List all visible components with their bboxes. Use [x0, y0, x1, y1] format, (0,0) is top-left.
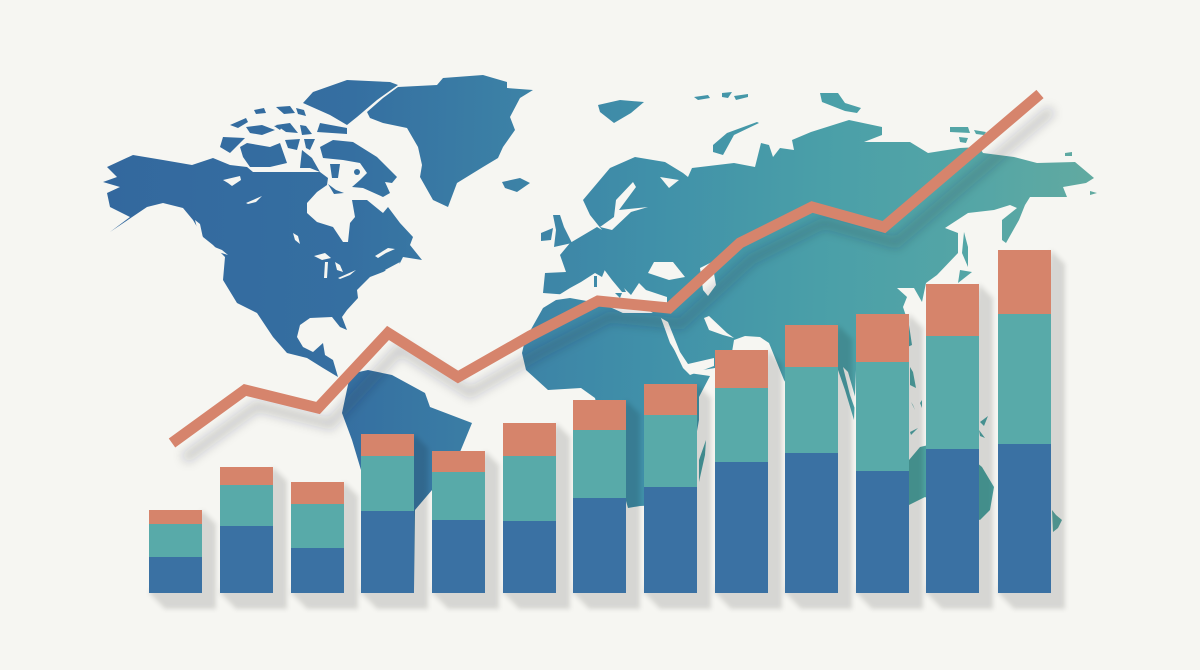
bar 10 — [785, 325, 838, 593]
lakes and inlets of North America — [195, 176, 400, 337]
Italy and Mediterranean islands — [594, 262, 626, 298]
Africa — [522, 298, 710, 508]
New Zealand — [1052, 510, 1062, 532]
Arctic islands — [220, 80, 398, 197]
world map — [103, 75, 1097, 590]
bar 4 — [361, 434, 414, 593]
bar 1 — [149, 510, 202, 593]
trend line — [172, 94, 1040, 443]
Indonesia and Pacific islands — [910, 367, 988, 438]
Australia — [909, 440, 994, 520]
stacked bar chart — [149, 250, 1051, 593]
bar 8 — [644, 384, 697, 593]
seas cut from Eurasia and Africa — [554, 177, 856, 412]
bar 7 — [573, 400, 626, 593]
bar 9 — [715, 350, 768, 593]
bar 11 — [856, 314, 909, 593]
Eurasia — [543, 120, 1094, 440]
bar 5 — [432, 451, 485, 593]
Madagascar — [699, 440, 706, 482]
South America — [342, 370, 472, 590]
trend line shadow — [184, 110, 1052, 459]
landmass: North America — [103, 155, 422, 377]
bar 12 — [926, 284, 979, 593]
European and Arctic Asian islands — [541, 92, 1097, 283]
bar 3 — [291, 482, 344, 593]
Iceland — [502, 178, 530, 192]
bar 6 — [503, 423, 556, 593]
bar 2 — [220, 467, 273, 593]
bar 13 — [998, 250, 1051, 593]
Greenland — [367, 75, 533, 207]
bar shadows — [149, 250, 1065, 609]
